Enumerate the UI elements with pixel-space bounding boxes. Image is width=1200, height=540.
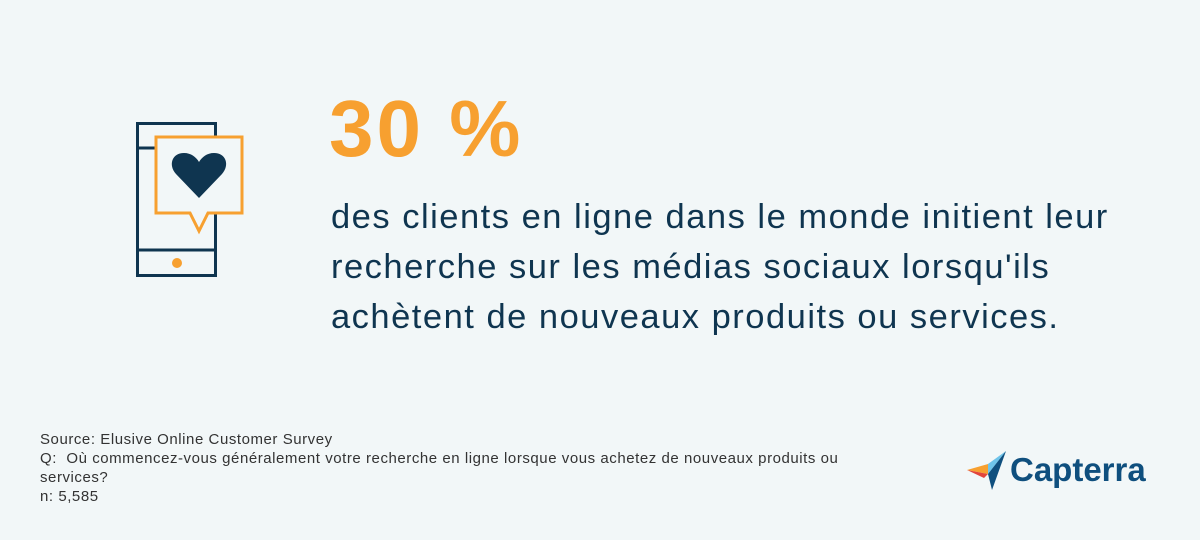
- source note: [40, 431, 838, 505]
- body text: achètent de nouveaux produits ou services.: [331, 298, 1060, 336]
- logo: Capterra: Capterra: [1010, 451, 1146, 488]
- body text: [331, 198, 1109, 336]
- source note: Source: Elusive Online Customer Survey: [40, 431, 333, 448]
- source note: n: 5,585: [40, 488, 99, 505]
- source note: Q: Où commencez-vous généralement votre recherche en ligne lorsque vous achetez de nouveaux produits ou services?: [40, 450, 838, 486]
- body text: des clients en ligne dans le monde initient leur: [331, 198, 1109, 236]
- body text: recherche sur les médias sociaux lorsqu'ils: [331, 248, 1050, 286]
- icon: phone with heart bubble: [136, 122, 244, 277]
- headline: 30 %: 30 %: [329, 84, 523, 173]
